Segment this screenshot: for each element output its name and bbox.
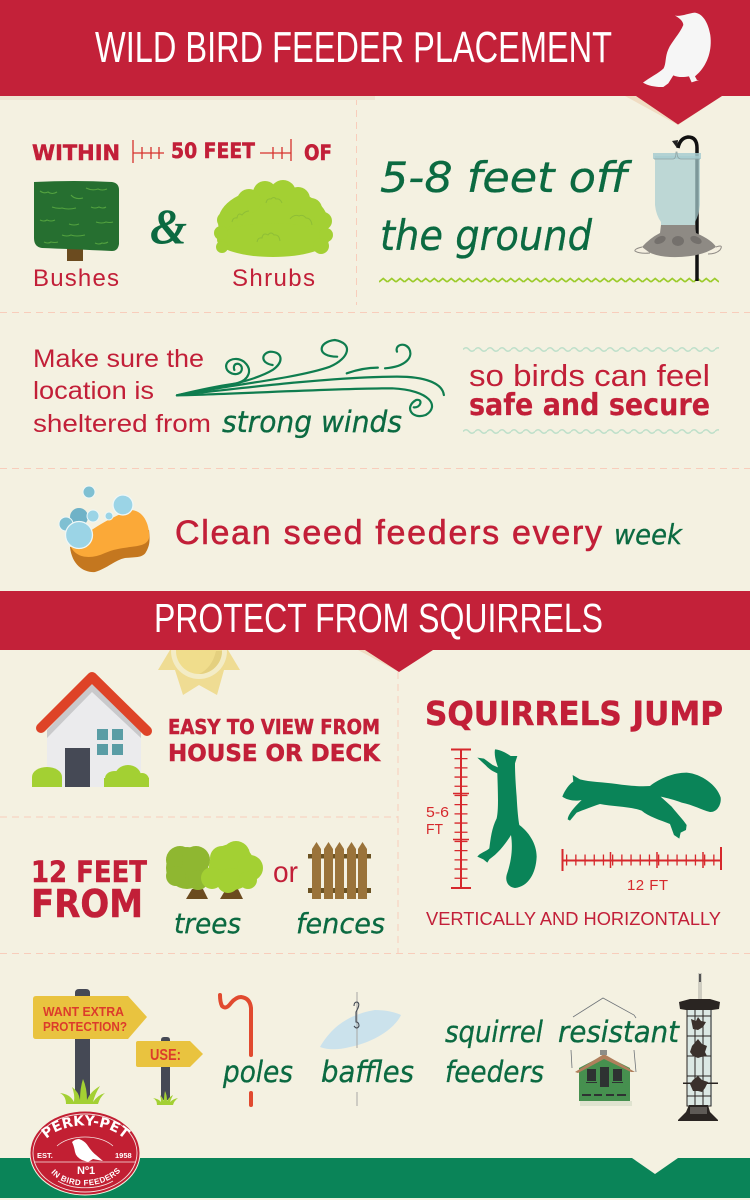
icon: fence bbox=[308, 842, 371, 899]
logo: Perky-Pet: IN BIRD FEEDERS bbox=[51, 1168, 120, 1186]
panel: wind shelter bbox=[33, 340, 719, 439]
view text bbox=[168, 715, 381, 767]
signpost: use bbox=[136, 1037, 203, 1105]
week text: week bbox=[614, 518, 684, 551]
label: 5-6 FT: 5-6 bbox=[426, 804, 449, 821]
twelve feet text: 12 FEET bbox=[31, 855, 147, 889]
icon: white bird bbox=[643, 13, 711, 87]
strong winds text: strong winds bbox=[222, 405, 402, 439]
distance heading bbox=[32, 139, 332, 165]
green footer bbox=[0, 1158, 750, 1198]
wind text block: sheltered from bbox=[33, 410, 211, 438]
logo: Perky-Pet: 1958 bbox=[115, 1151, 132, 1160]
twelve feet text: FROM bbox=[31, 882, 143, 926]
icon: green house feeder bbox=[571, 998, 636, 1106]
panel: squirrels jump bbox=[425, 694, 723, 929]
wind text block bbox=[33, 345, 211, 438]
icon: wind swirls bbox=[177, 340, 444, 416]
view text: HOUSE OR DECK bbox=[168, 741, 381, 767]
or text: or bbox=[273, 856, 298, 889]
label: 5-6 FT: FT bbox=[426, 821, 443, 838]
label: feeders: feeders bbox=[445, 1055, 544, 1089]
vertically and horizontally caption: VERTICALLY AND HORIZONTALLY bbox=[426, 909, 721, 929]
icon: sponge with bubbles bbox=[59, 486, 150, 572]
label: trees: trees bbox=[174, 907, 241, 940]
view text: EASY TO VIEW FROM bbox=[168, 715, 380, 739]
clean text: Clean seed feeders every bbox=[175, 514, 602, 552]
safe and secure text: safe and secure bbox=[469, 388, 710, 423]
label: 5-6 FT bbox=[426, 804, 449, 838]
panel: twelve feet bbox=[31, 841, 385, 940]
vertical ruler bbox=[451, 749, 471, 888]
panel: distance from cover bbox=[32, 139, 333, 292]
signpost: use: USE: bbox=[150, 1047, 181, 1064]
panel: extra protection bbox=[33, 973, 720, 1121]
logo: Perky-Pet: PERKY-PET bbox=[41, 1115, 131, 1138]
icon: shrub bbox=[214, 180, 333, 257]
icon: grass bbox=[60, 1079, 105, 1104]
signpost: want extra protection: WANT EXTRA bbox=[43, 1004, 125, 1019]
panel: house view bbox=[32, 677, 381, 787]
distance heading: OF bbox=[304, 141, 332, 165]
icon: hummingbird feeder on pole bbox=[635, 137, 721, 281]
ampersand: & bbox=[150, 198, 187, 254]
panel: clean feeders bbox=[59, 486, 684, 572]
icon: small grass bbox=[153, 1091, 178, 1105]
squirrels heading: SQUIRRELS JUMP bbox=[425, 694, 723, 733]
icon: pole bbox=[220, 995, 251, 1105]
wind text block: location is bbox=[33, 377, 154, 405]
icon: house bbox=[32, 677, 149, 787]
label: fences: fences bbox=[296, 907, 385, 940]
label: resistant: resistant bbox=[558, 1015, 681, 1049]
horizontal ruler bbox=[562, 847, 721, 871]
section banner: protect from squirrels bbox=[0, 591, 750, 672]
logo: Perky-Pet bbox=[30, 1112, 140, 1196]
section title: PROTECT FROM SQUIRRELS bbox=[154, 595, 603, 641]
icon: leaping squirrel horizontal bbox=[562, 773, 721, 839]
label: squirrel: squirrel bbox=[445, 1015, 543, 1049]
wind text block: Make sure the bbox=[33, 345, 204, 373]
height text line two: the ground bbox=[380, 211, 592, 260]
icon: sun bbox=[158, 623, 240, 695]
distance heading: WITHIN bbox=[32, 141, 120, 165]
icon: leaping squirrel vertical bbox=[477, 749, 537, 888]
signpost: want extra protection: PROTECTION? bbox=[43, 1019, 127, 1034]
icon: baffle bbox=[320, 992, 401, 1106]
label: Shrubs: Shrubs bbox=[232, 265, 315, 292]
safe and secure text: so birds can feel bbox=[469, 358, 710, 393]
distance heading: 50 FEET bbox=[171, 139, 256, 163]
icon: bush bbox=[34, 181, 119, 261]
icon: tube feeder bbox=[678, 973, 720, 1121]
label: Bushes: Bushes bbox=[33, 265, 119, 292]
twelve feet text bbox=[31, 855, 147, 926]
label: poles: poles bbox=[222, 1055, 293, 1089]
signpost: want extra protection bbox=[33, 989, 147, 1104]
panel: feeder height bbox=[379, 137, 721, 284]
label: baffles: baffles bbox=[321, 1055, 414, 1089]
height text: 5-8 feet off bbox=[380, 153, 633, 202]
ground zigzag line bbox=[379, 277, 719, 284]
logo: Perky-Pet: Nº1 bbox=[77, 1165, 95, 1177]
logo: Perky-Pet: EST. bbox=[37, 1151, 53, 1160]
safe and secure text bbox=[463, 346, 719, 435]
label: 12 FT: 12 FT bbox=[627, 877, 668, 894]
icon: trees bbox=[166, 841, 263, 899]
header banner bbox=[0, 0, 750, 125]
